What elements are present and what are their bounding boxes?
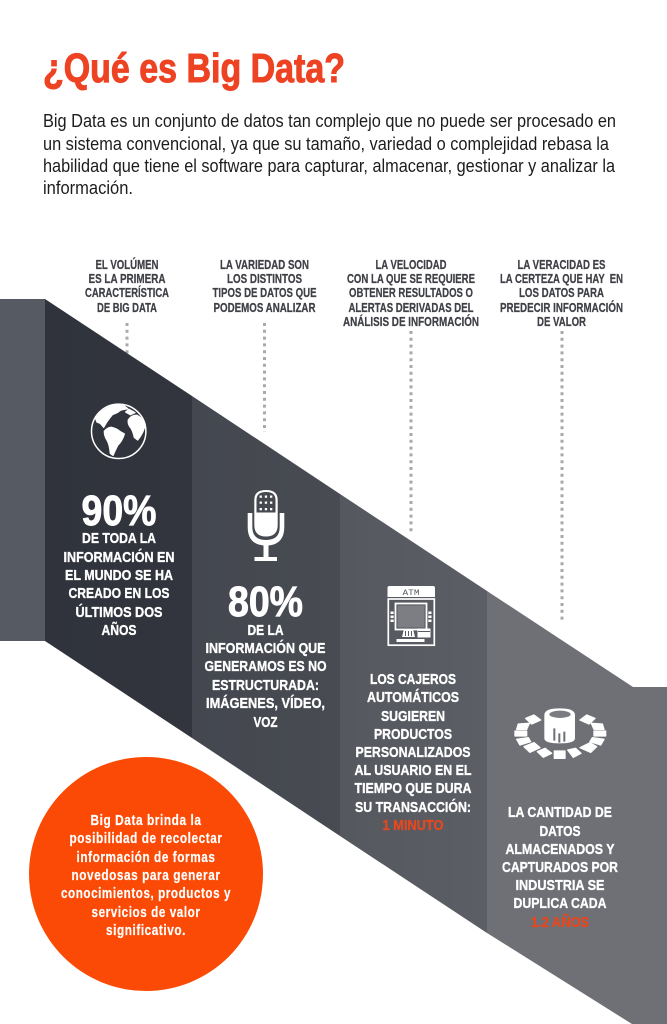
caption: volumen — [85, 257, 169, 315]
callout: orange circle: posibilidad de recolectar — [70, 831, 222, 847]
stat: 80%: VOZ — [254, 714, 278, 731]
stat: 90%: CREADO EN LOS — [68, 585, 170, 602]
caption: velocidad: ANÁLISIS DE INFORMACIÓN — [343, 314, 479, 329]
left strip — [0, 299, 45, 641]
caption: volumen: DE BIG DATA — [97, 301, 157, 315]
callout: orange circle: información de formas — [76, 850, 216, 866]
title: ¿Qué es Big Data? — [43, 45, 345, 91]
caption: veracidad: DE VALOR — [537, 315, 586, 329]
stat: 80%: INFORMACIÓN QUE — [206, 639, 326, 657]
text: cantidad de datos: ALMACENADOS Y — [506, 841, 614, 858]
stat: 80%: 80% — [228, 578, 303, 626]
text: cajeros: 1 MINUTO — [382, 817, 444, 834]
caption: volumen: CARACTERÍSTICA — [85, 285, 169, 300]
stat: 90%: AÑOS — [102, 621, 136, 639]
caption: variedad: LA VARIEDAD SON — [220, 258, 309, 272]
caption: velocidad — [343, 258, 479, 329]
callout: orange circle: significativo. — [106, 923, 186, 939]
text: cajeros: SUGIEREN — [381, 708, 445, 725]
caption: veracidad: PREDECIR INFORMACIÓN — [500, 300, 623, 315]
text: cajeros: PERSONALIZADOS — [356, 744, 470, 761]
icon: microphone — [248, 490, 284, 561]
text: cantidad de datos: DUPLICA CADA — [514, 895, 607, 912]
caption: velocidad: ALERTAS DERIVADAS DEL — [348, 301, 474, 315]
icon: ATM — [388, 586, 435, 645]
text: cantidad de datos: DATOS — [540, 823, 580, 840]
text: cantidad de datos: 1.2 AÑOS — [531, 913, 589, 931]
text: cajeros: AL USUARIO EN EL — [354, 762, 472, 779]
caption: veracidad: LOS DATOS PARA — [519, 286, 604, 300]
stat: 90%: EL MUNDO SE HA — [65, 567, 173, 584]
callout: orange circle: conocimientos, productos y — [61, 886, 231, 902]
dotted connector lines — [127, 323, 562, 621]
stat: 90%: ÚLTIMOS DOS — [76, 603, 162, 621]
text: cajeros: LOS CAJEROS — [370, 671, 456, 688]
stat: 80% — [204, 578, 327, 731]
icon: ATM: ATM — [402, 588, 420, 598]
stat: 90%: INFORMACIÓN EN — [64, 548, 174, 566]
stat: 90%: 90% — [82, 487, 156, 535]
stat: 90% — [64, 487, 174, 639]
text: cantidad de datos: CAPTURADOS POR — [502, 859, 618, 876]
text: cajeros: SU TRANSACCIÓN: — [355, 798, 471, 816]
panel: velocidad band — [340, 494, 487, 933]
stat: 80%: DE LA — [248, 622, 284, 639]
caption: variedad: LOS DISTINTOS — [227, 272, 302, 286]
icon: data disk — [515, 708, 606, 758]
intro paragraph: un sistema convencional, ya que su tamaño, variedad o complejidad rebasa la — [43, 133, 610, 154]
panel: volumen band — [45, 299, 192, 738]
text: cantidad de datos — [502, 804, 618, 931]
callout: orange circle — [29, 757, 263, 991]
caption: variedad: PODEMOS ANALIZAR — [214, 301, 316, 315]
stat: 80%: ESTRUCTURADA: — [212, 677, 319, 694]
caption: veracidad: LA CERTEZA QUE HAY EN — [500, 272, 623, 286]
text: cantidad de datos: LA CANTIDAD DE — [508, 804, 612, 821]
panel: variedad band — [192, 396, 340, 836]
caption: volumen: ES LA PRIMERA — [88, 272, 166, 286]
text: cajeros: TIEMPO QUE DURA — [354, 780, 472, 797]
caption: velocidad: LA VELOCIDAD — [376, 258, 446, 272]
text: cantidad de datos: INDUSTRIA SE — [516, 877, 604, 894]
stat: 90%: DE TODA LA — [82, 530, 156, 547]
caption: veracidad — [500, 258, 623, 329]
text: cajeros: AUTOMÁTICOS — [367, 689, 459, 706]
text: cajeros — [354, 671, 472, 834]
caption: variedad — [212, 258, 316, 315]
stat: 80%: IMÁGENES, VÍDEO, — [206, 695, 325, 712]
intro paragraph — [43, 110, 616, 198]
caption: volumen: EL VOLÚMEN — [96, 257, 158, 272]
caption: velocidad: OBTENER RESULTADOS O — [349, 286, 473, 300]
caption: variedad: TIPOS DE DATOS QUE — [212, 286, 316, 300]
panel: veracidad band — [487, 591, 667, 1024]
caption: veracidad: LA VERACIDAD ES — [518, 258, 606, 272]
callout: orange circle: novedosas para generar — [72, 868, 220, 884]
stat: 80%: GENERAMOS ES NO — [204, 658, 327, 675]
intro paragraph: información. — [43, 177, 133, 198]
icon: globe — [92, 404, 146, 458]
text: cajeros: PRODUCTOS — [374, 726, 452, 743]
callout: orange circle: servicios de valor — [92, 905, 200, 921]
caption: velocidad: CON LA QUE SE REQUIERE — [347, 272, 475, 286]
callout: orange circle: Big Data brinda la — [90, 813, 202, 829]
